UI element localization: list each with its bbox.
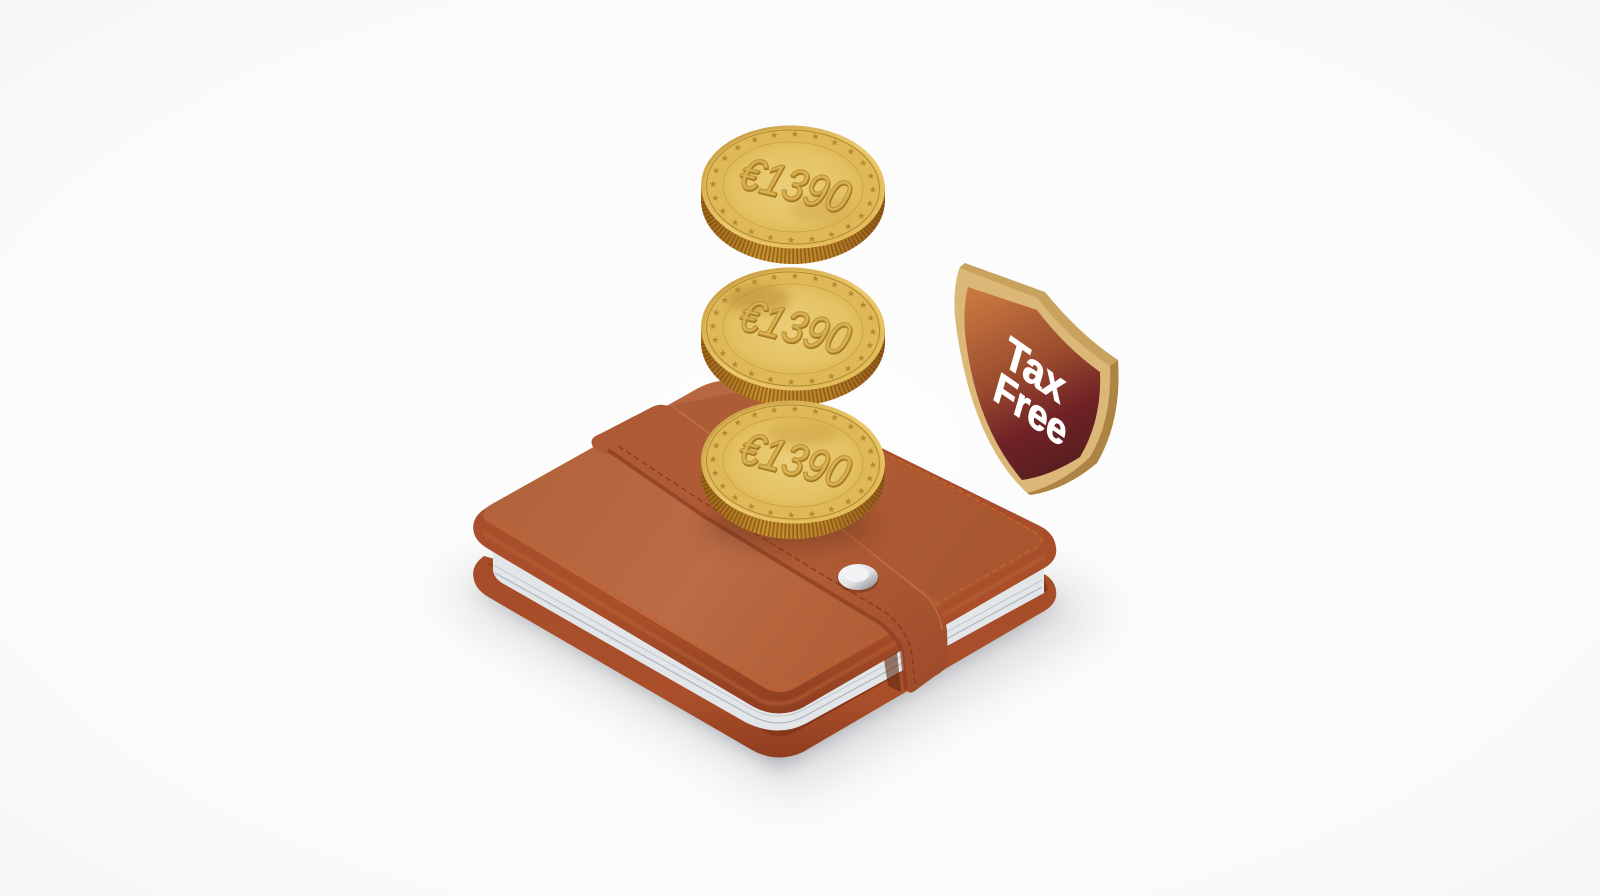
coin mottling <box>791 195 855 223</box>
coin mottling <box>726 285 790 313</box>
rim highlight <box>482 532 1046 704</box>
coin value: €1390 <box>732 423 857 498</box>
shield label: Tax <box>999 327 1071 414</box>
coin mottling <box>767 422 839 446</box>
coin value: €1390 <box>732 290 857 365</box>
coin value: €1390 <box>732 424 858 500</box>
wallet bottom plate <box>473 556 1056 758</box>
coin bottom <box>699 397 887 539</box>
coin top <box>699 122 887 264</box>
wallet pages <box>493 548 1044 731</box>
shield rim <box>955 268 1110 493</box>
shield: Tax Free: Free <box>989 363 1073 456</box>
coin value: €1390 <box>732 149 858 225</box>
shield side right <box>1027 360 1119 495</box>
snap button <box>837 564 879 593</box>
coin middle <box>699 264 887 406</box>
strap stitching <box>618 446 915 684</box>
shield face <box>964 287 1100 480</box>
strap shadow on page <box>884 652 901 692</box>
wallet inner groove <box>486 562 1048 736</box>
shield side top <box>955 263 1119 495</box>
stitching <box>491 456 1041 689</box>
strap <box>592 405 948 693</box>
wallet top plate <box>473 380 1056 714</box>
coin shadow on wallet <box>705 501 875 549</box>
strap lip <box>608 450 906 690</box>
shield: Tax Free <box>955 263 1119 495</box>
wallet top face <box>483 380 1045 692</box>
coin value: €1390 <box>732 291 858 367</box>
back panel shade <box>673 388 1045 606</box>
wallet <box>473 380 1056 758</box>
coin value: €1390 <box>732 148 857 223</box>
wallet shadow <box>440 480 1110 790</box>
page lines <box>495 573 1042 723</box>
